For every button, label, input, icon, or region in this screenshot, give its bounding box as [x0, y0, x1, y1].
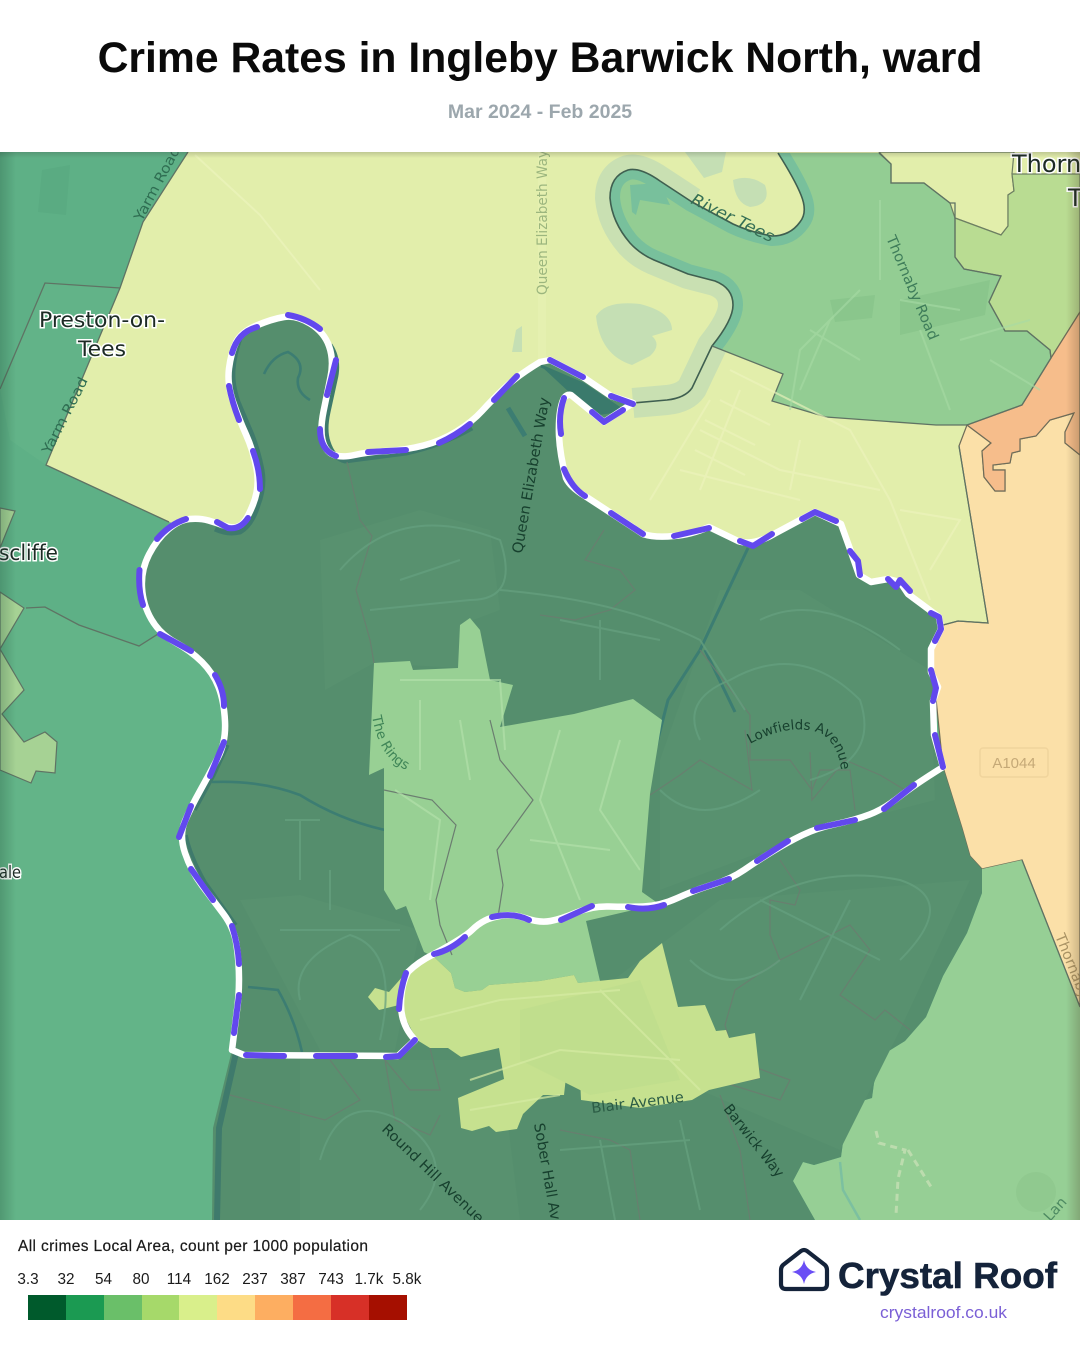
icon: house with star — [781, 1250, 827, 1289]
road labels: Queen Elizabeth Way — [510, 396, 553, 555]
title: Crime Rates in Ingleby Barwick North, ward — [98, 34, 982, 82]
road labels: River Tees — [688, 190, 777, 246]
stream and parkland in south east — [840, 1162, 1056, 1220]
legend — [17, 1238, 422, 1320]
legend: 5.8k — [393, 1271, 421, 1288]
area: mid green east of the river — [610, 153, 1051, 425]
place label: Preston-on-Tees: Preston-on- — [39, 308, 165, 332]
streams — [212, 352, 748, 1052]
road labels: Yarm Road — [39, 375, 92, 458]
area: north-west darker green — [0, 152, 188, 646]
lighter housing patches — [320, 510, 500, 690]
legend title: All crimes Local Area, count per 1000 population — [18, 1238, 368, 1255]
area: pale blob west of boundary — [368, 976, 403, 1010]
area: pale fragments on west edge — [0, 508, 57, 783]
legend: 1.7k — [355, 1271, 383, 1288]
logo: Crystal Roof — [778, 1248, 1058, 1322]
ward boundary purple dashes — [139, 315, 943, 1057]
subtitle: date range: Mar 2024 - Feb 2025 — [448, 101, 632, 123]
road labels: Barwick Way — [720, 1102, 787, 1181]
legend: 162 — [204, 1271, 230, 1288]
place label: Eaglescliffe fragment: scliffe — [0, 541, 58, 565]
area: orange north east — [967, 312, 1080, 491]
legend: 32 — [57, 1271, 74, 1288]
road labels: Lowfields Avenue — [746, 719, 848, 769]
river band — [610, 153, 990, 346]
river line — [610, 153, 804, 403]
road labels: Thornaby Road — [882, 232, 941, 343]
boundary lines between areas — [0, 152, 1080, 1007]
area: centre light green — [369, 618, 662, 992]
internal boundary lines — [230, 462, 910, 1220]
wordmark: Crystal Roof — [838, 1255, 1058, 1296]
legend: 3.3 — [17, 1271, 39, 1288]
legend: 387 — [280, 1271, 306, 1288]
area: western green — [0, 152, 1080, 1220]
legend: 54 — [95, 1271, 112, 1288]
area: ward and southern dark green — [142, 317, 982, 1220]
road labels: Yarm Road — [131, 152, 184, 225]
place label: Preston-on-Tees: Tees — [77, 337, 126, 361]
lakes — [512, 152, 767, 365]
legend colour scale — [28, 1295, 407, 1320]
legend: 237 — [242, 1271, 268, 1288]
lower-density block — [520, 980, 680, 1095]
river halo — [610, 169, 733, 403]
railway — [876, 1131, 933, 1215]
road labels: The Rings — [372, 714, 409, 769]
road labels — [39, 152, 1080, 1220]
dark water edge — [217, 1053, 236, 1220]
map edge shading — [0, 152, 1080, 1220]
legend numbers — [17, 1271, 422, 1288]
ward boundary white line — [142, 317, 943, 1056]
area: yellow north — [46, 152, 1080, 640]
road network — [195, 152, 960, 600]
place label: Thornaby — [1011, 150, 1080, 212]
area: pale yellow-green south centre — [401, 943, 760, 1132]
road labels: Blair Avenue — [591, 1090, 685, 1117]
road shield: A1044: A1044 — [992, 755, 1036, 772]
centre area dividing lines — [384, 720, 533, 955]
legend: 80 — [132, 1271, 150, 1288]
website: crystalroof.co.uk — [880, 1304, 1008, 1322]
road shield: A1044 — [980, 748, 1048, 777]
choropleth map — [0, 152, 1080, 1220]
area: cream east — [931, 413, 1080, 1007]
area: south east green — [793, 860, 1080, 1220]
area: top right yellow — [879, 152, 1014, 235]
place label: Preston-on-Tees — [39, 308, 165, 361]
legend: 743 — [318, 1271, 344, 1288]
legend: 114 — [167, 1271, 191, 1288]
road labels: Sober Hall Av — [530, 1122, 563, 1220]
area: top right pale green — [955, 174, 1080, 358]
